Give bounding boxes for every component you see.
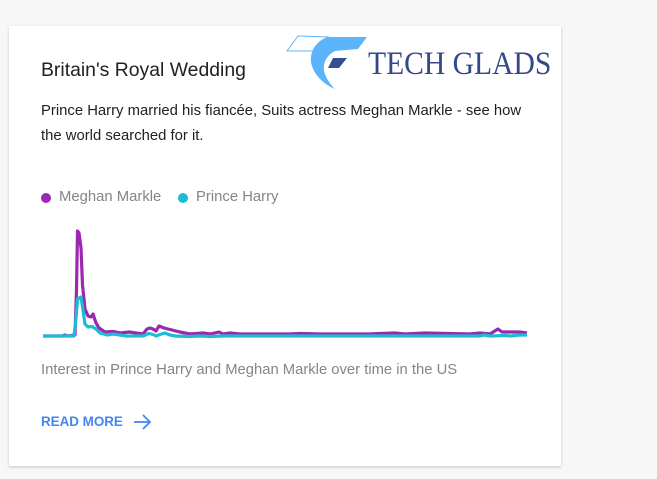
logo: Tech Glads (286, 36, 551, 89)
logo: Tech Glads: TECH GLADS (368, 46, 551, 82)
legend label: Meghan Markle: Meghan Markle (59, 189, 161, 205)
chart caption: Interest in Prince Harry and Meghan Markle over time in the US (41, 362, 457, 378)
description text (41, 103, 522, 144)
link text: READ MORE (41, 414, 123, 429)
line: Prince Harry (43, 297, 527, 336)
title: Britain's Royal Wedding (41, 59, 246, 81)
legend dot: Meghan Markle (41, 193, 51, 203)
legend label: Prince Harry: Prince Harry (196, 189, 278, 205)
link: read more (41, 414, 152, 430)
description text: the world searched for it. (41, 128, 204, 144)
panel: card (9, 26, 561, 466)
description text: Prince Harry married his fiancée, Suits actress Meghan Markle - see how (41, 103, 521, 119)
icon: arrow (134, 414, 152, 430)
line: Meghan Markle (43, 231, 527, 336)
legend (41, 189, 278, 205)
line chart (43, 229, 528, 338)
legend dot: Prince Harry (178, 193, 188, 203)
